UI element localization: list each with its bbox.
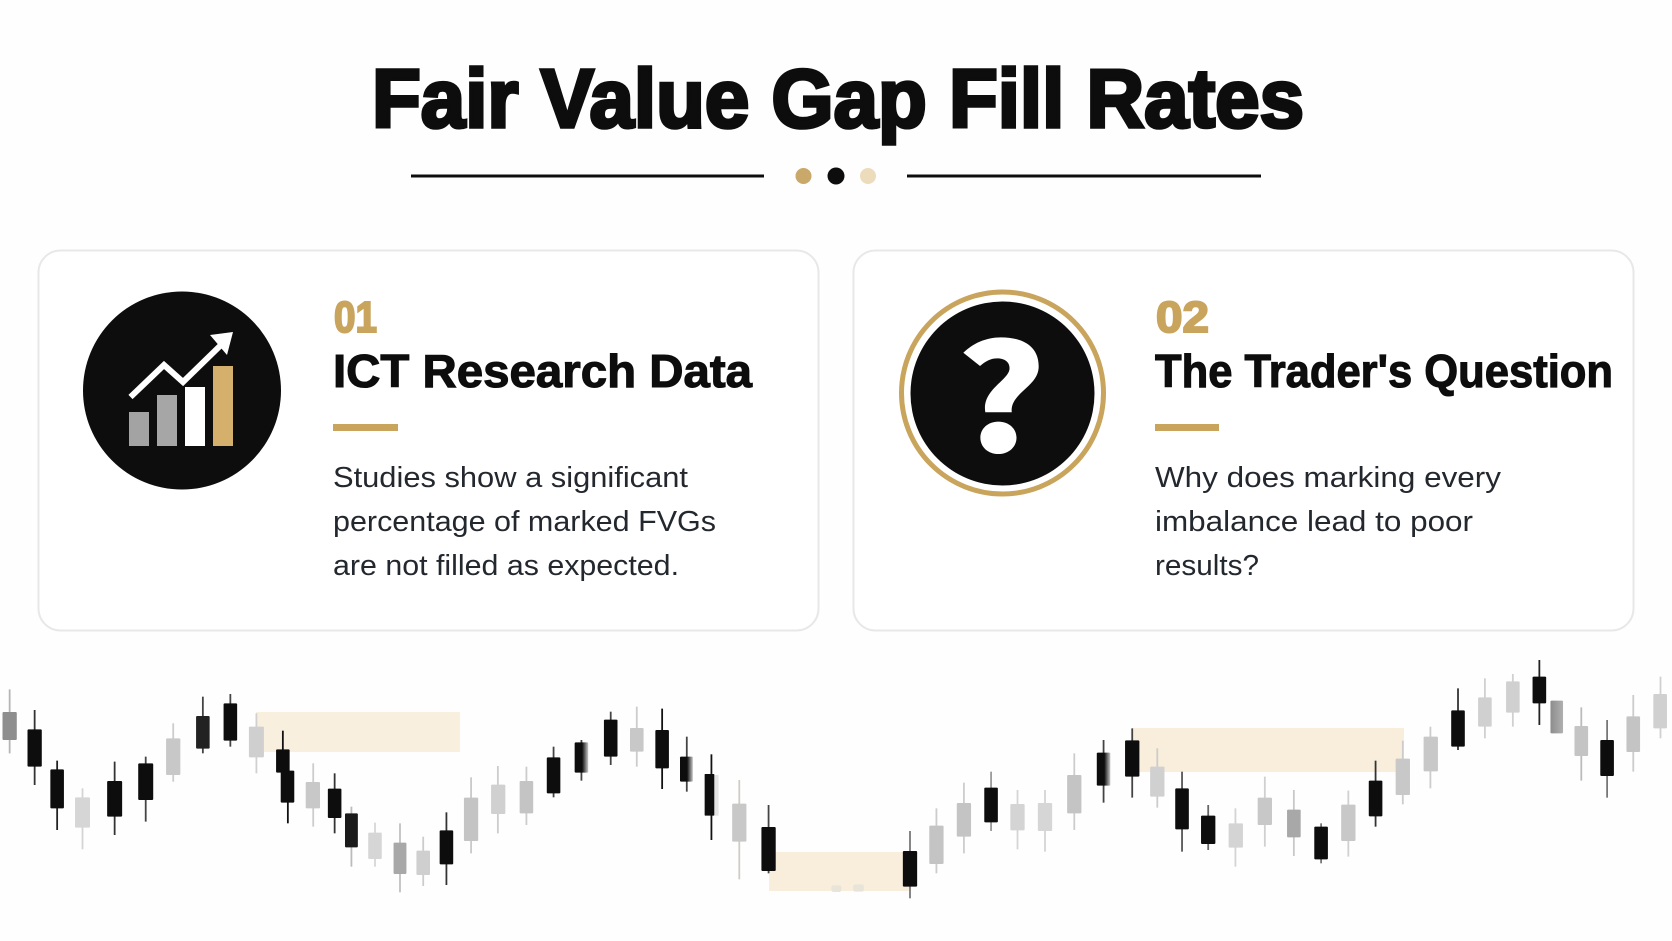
candles: middle section [575,707,1110,898]
panel: the trader's question [854,250,1634,630]
body text: Studies show a significant [333,462,688,494]
panel: ICT research data [38,250,818,630]
body text: Why does marking every [1155,462,1502,494]
card background [854,250,1634,630]
heading: ICT Research Data: ICT Research Data [333,345,752,397]
card background [38,250,818,630]
candlestick chart with fair value gap zones [2,660,1667,898]
gap zone 3 [1132,728,1404,772]
candles: left section [2,689,560,892]
body text: results? [1155,550,1259,582]
icon: question mark in ringed circle: ? [955,281,1047,494]
title: Fair Value Gap Fill Rates [372,52,1304,145]
heading: The Trader's Question: The Trader's Question [1155,345,1613,397]
accent underline [1155,424,1219,431]
body text [333,462,716,582]
candles: right section [1125,660,1667,867]
gap zone 1 [256,712,460,752]
icon: question mark in ringed circle [902,281,1104,494]
number 02: 02 [1156,293,1209,342]
body text: imbalance lead to poor [1155,506,1473,538]
number 01: 01 [334,293,377,342]
title divider with dots [411,168,1261,184]
body text [1155,462,1502,582]
body text: are not filled as expected. [333,550,679,582]
gap zone 2 [769,852,909,891]
icon: rising bar chart with arrow [83,292,281,490]
body text: percentage of marked FVGs [333,506,716,538]
accent underline [333,424,398,431]
